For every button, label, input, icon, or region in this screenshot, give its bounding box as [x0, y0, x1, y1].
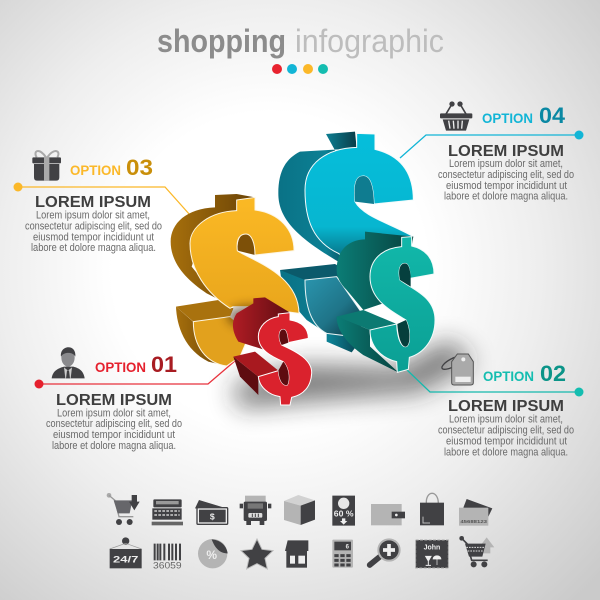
icon: postage label — [416, 540, 448, 568]
icon: store — [285, 540, 308, 568]
text block: eiusmod tempor incididunt ut — [53, 429, 175, 441]
ground shadow — [232, 340, 474, 408]
text block: Lorem ipsum dolor sit amet, — [449, 414, 563, 426]
icon: truck — [240, 496, 271, 525]
icon: calculator — [332, 540, 353, 568]
text block: eiusmod tempor incididunt ut — [33, 232, 154, 244]
icon: gift — [32, 151, 61, 181]
title colour dots — [272, 64, 328, 74]
icon: credit cards — [459, 499, 492, 526]
red dollar sign — [233, 297, 312, 405]
icon: cart with down arrow — [107, 493, 140, 525]
icon: 24/7 sign: 24/7 — [113, 554, 138, 564]
icon: barcode: 36059 — [153, 560, 182, 570]
icon: barcode — [153, 544, 182, 570]
panel: option 02 — [438, 354, 584, 458]
connector dot — [574, 130, 584, 140]
icon: percent sticker: % — [206, 548, 217, 562]
icon: wallet — [371, 504, 405, 525]
title: shopping — [157, 23, 286, 59]
option label: OPTION — [483, 369, 534, 384]
text block: eiusmod tempor incididunt ut — [446, 436, 567, 448]
icon: box — [284, 495, 315, 525]
icon: door hanger — [332, 496, 355, 526]
icon: banknotes: $ — [210, 512, 215, 522]
text block: labore et dolore magna aliqua. — [31, 242, 156, 254]
icon: magnifier — [370, 539, 400, 565]
heading: LOREM IPSUM — [448, 143, 564, 160]
leader lines — [18, 135, 579, 392]
icon row: left half — [107, 493, 315, 570]
text block: Lorem ipsum dolor sit amet, — [449, 158, 563, 170]
heading: LOREM IPSUM — [448, 398, 564, 415]
icon: postage label: John — [424, 545, 440, 552]
text block: labore et dolore magna aliqua. — [444, 446, 568, 458]
option number: 02 — [540, 361, 566, 386]
icon: businessman — [52, 347, 85, 378]
option label: OPTION — [95, 360, 146, 375]
icon: door hanger: 60 % — [334, 508, 354, 518]
icon: calculator: 6 — [346, 545, 350, 551]
text block: labore et dolore magna aliqua. — [444, 190, 568, 202]
connector dot — [574, 388, 584, 396]
heading: LOREM IPSUM — [56, 392, 172, 409]
text block — [438, 158, 574, 202]
panel: option 03 — [14, 151, 162, 254]
icon: cart with up arrow — [459, 536, 494, 567]
text block: Lorem ipsum dolor sit amet, — [57, 408, 171, 420]
icon: basket — [440, 101, 472, 131]
title — [157, 23, 444, 59]
large blue dollar sign — [278, 132, 413, 352]
green dollar sign — [337, 232, 435, 372]
chart: 3D dollar signs — [171, 132, 435, 405]
text block: eiusmod tempor incididunt ut — [446, 180, 567, 192]
icon row: right half — [332, 493, 494, 568]
option number: 01 — [151, 352, 177, 377]
connector dot — [14, 182, 22, 192]
icon: percent sticker — [198, 539, 228, 568]
text block: consectetur adipiscing elit, sed do — [25, 220, 162, 232]
icon: price tag — [440, 354, 473, 385]
option number: 03 — [126, 155, 153, 180]
icon: banknotes — [195, 500, 228, 524]
text block: Lorem ipsum dolor sit amet, — [36, 210, 150, 222]
text block — [25, 210, 162, 254]
yellow dollar sign — [171, 194, 299, 366]
text block: consectetur adipiscing elit, sed do — [438, 424, 574, 436]
text block: consectetur adipiscing elit, sed do — [438, 169, 574, 181]
text block — [46, 408, 182, 452]
heading: LOREM IPSUM — [35, 194, 151, 211]
title: infographic — [295, 23, 444, 59]
text block: consectetur adipiscing elit, sed do — [46, 418, 182, 430]
icon: star — [241, 539, 273, 569]
icon: cash register — [152, 499, 183, 525]
text block: labore et dolore magna aliqua. — [52, 440, 176, 452]
panel: option 04 — [438, 101, 584, 202]
option number: 04 — [539, 103, 566, 128]
option label: OPTION — [482, 111, 533, 126]
connector dot — [34, 380, 44, 388]
icon: credit cards: 45688123 — [460, 519, 488, 524]
icon: 24/7 sign — [110, 537, 142, 568]
option label: OPTION — [70, 163, 121, 178]
panel: option 01 — [34, 347, 182, 452]
text block — [438, 414, 574, 458]
icon: shopping bag — [420, 493, 444, 525]
